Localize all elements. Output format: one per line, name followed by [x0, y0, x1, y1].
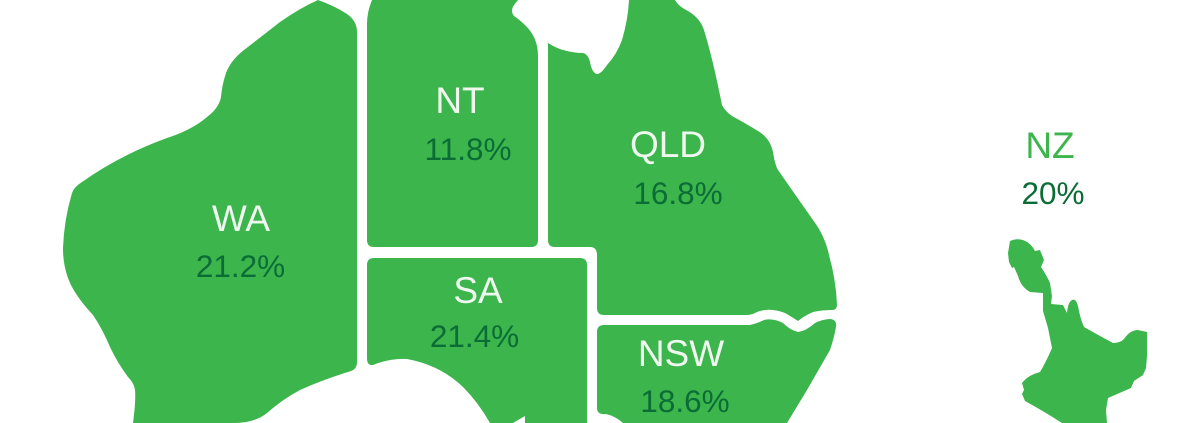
- region: SA: 21.4%: [430, 318, 519, 354]
- region: QLD: 16.8%: [633, 175, 723, 211]
- region: NSW: 18.6%: [640, 383, 730, 419]
- NZ North Island shape: [1008, 239, 1147, 423]
- NZ heading: NZ: [1025, 125, 1075, 166]
- region: WA: WA: [212, 198, 270, 239]
- region: NZ: [1008, 125, 1147, 423]
- region: SA: SA: [453, 270, 503, 311]
- region: WA: 21.2%: [196, 248, 285, 284]
- region: NSW: [597, 319, 836, 423]
- region: SA: [367, 258, 587, 423]
- region: NT: 11.8%: [425, 131, 511, 167]
- region: QLD: QLD: [630, 124, 706, 165]
- region: QLD: [548, 0, 837, 321]
- region: NT: [367, 0, 538, 247]
- region: NT: NT: [435, 80, 485, 121]
- NZ value: 20%: [1021, 175, 1085, 211]
- region: NSW: NSW: [638, 333, 724, 374]
- region: WA: [63, 0, 357, 423]
